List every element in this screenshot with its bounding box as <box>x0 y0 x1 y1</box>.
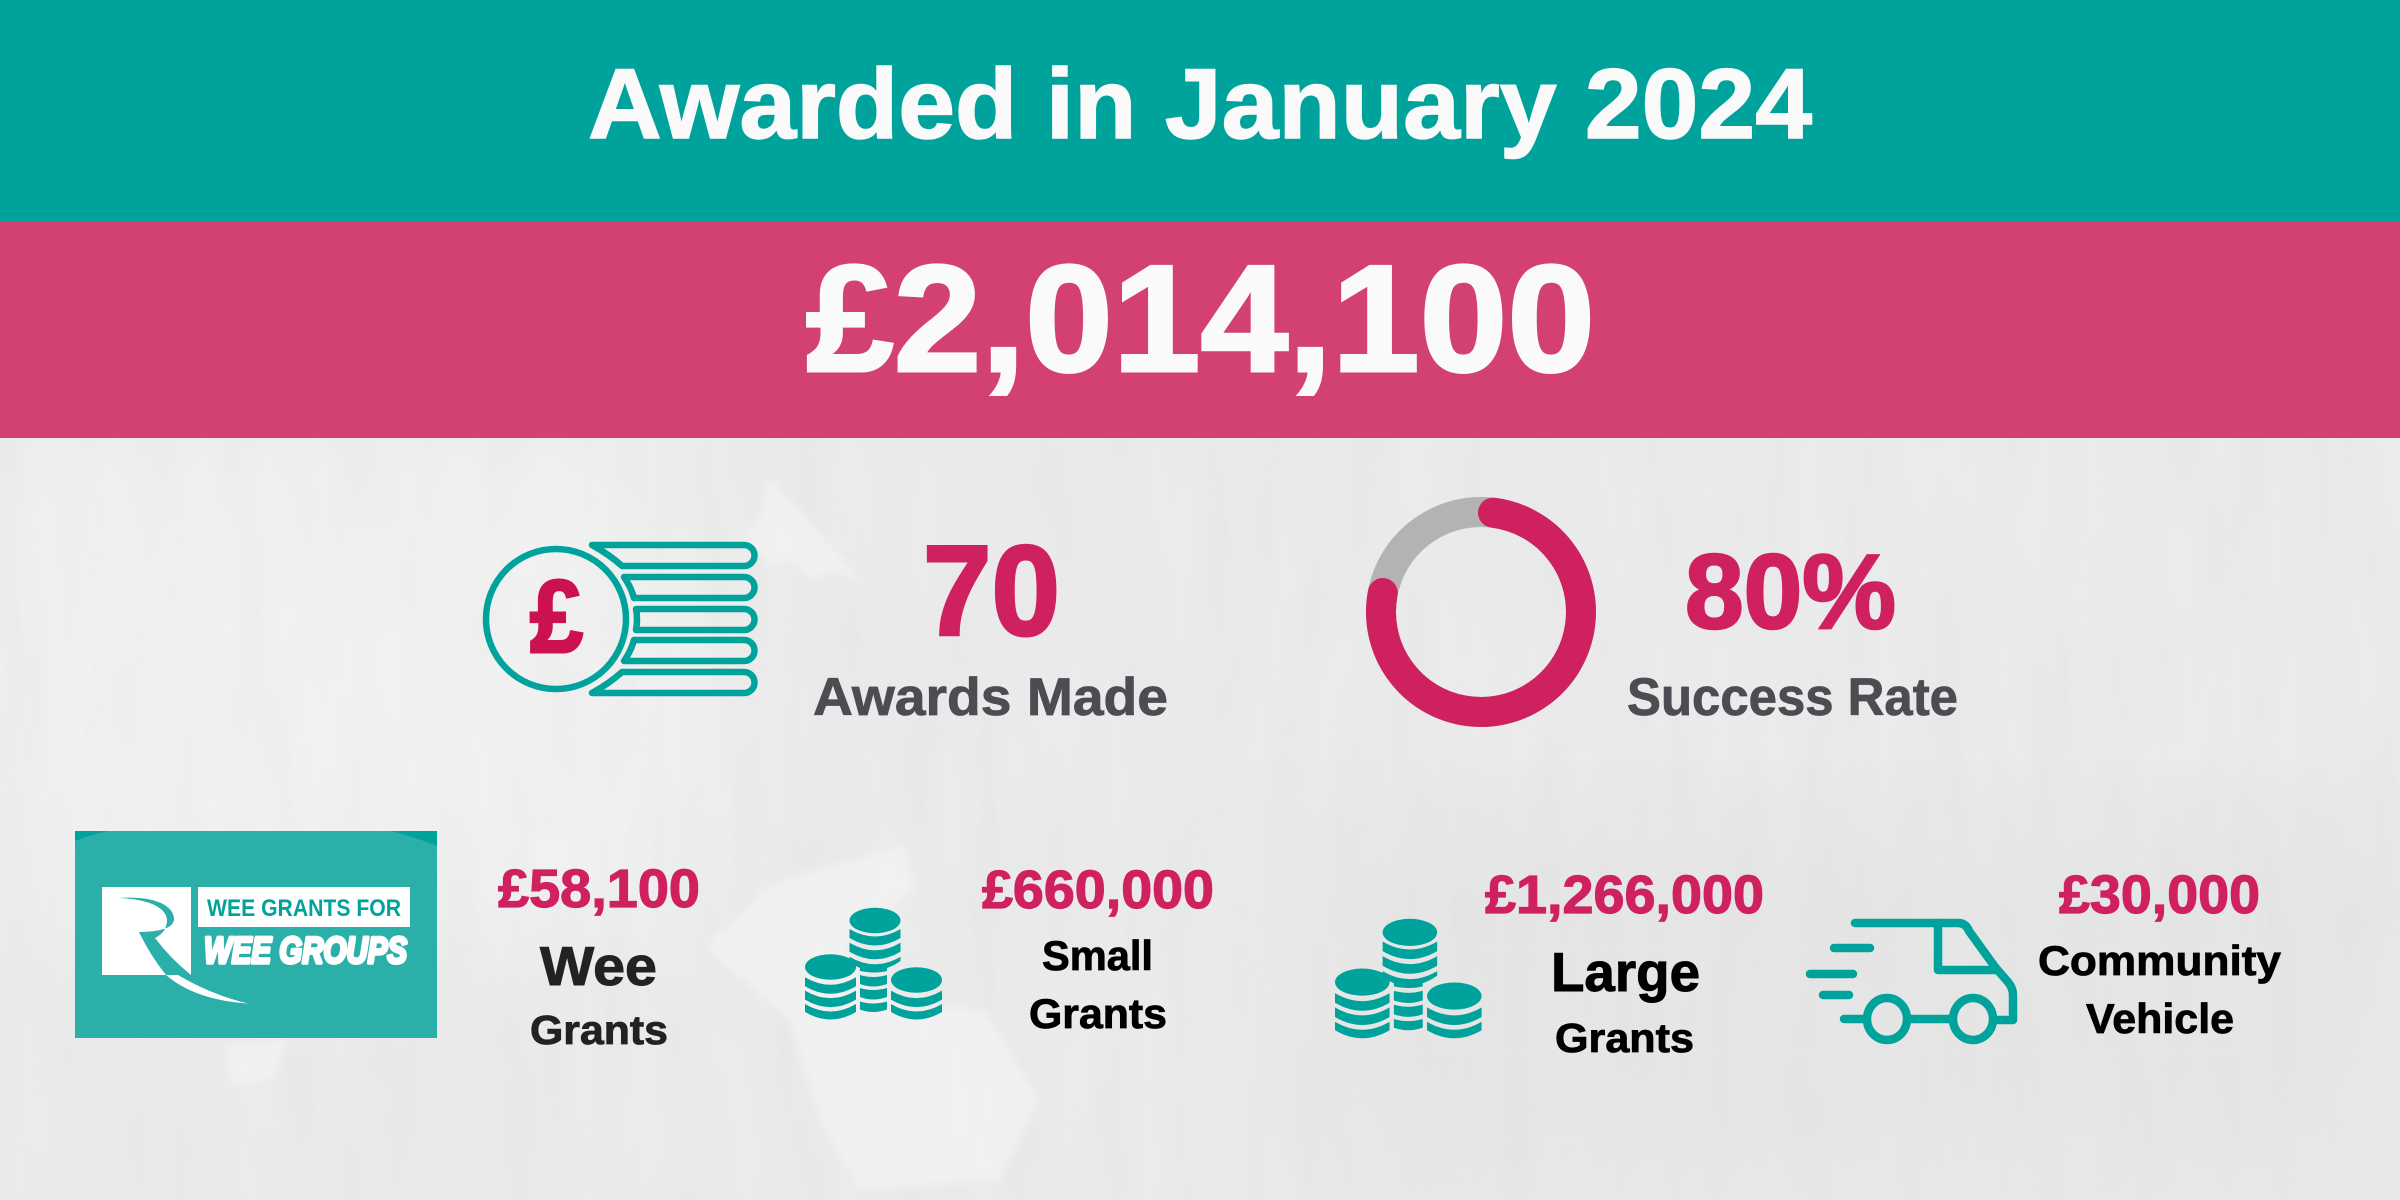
stat: success rate <box>1627 533 1958 727</box>
logo: wee grants for wee groups: WEE GROUPS <box>204 930 407 971</box>
stat: awards made: 70 <box>923 520 1060 663</box>
icon: pound coin stack: £ <box>530 559 583 674</box>
stat: community vehicle: £30,000 <box>2059 865 2260 925</box>
stat: small grants: Small <box>1042 932 1153 979</box>
icon: delivery van <box>1810 923 2013 1040</box>
stat: large grants: £1,266,000 <box>1485 865 1764 925</box>
stat: community vehicle: Community <box>2038 937 2282 984</box>
stat: wee grants <box>498 859 700 1053</box>
teal header band <box>0 0 2400 222</box>
stat: small grants: Grants <box>1029 990 1167 1037</box>
donut chart: 80 percent <box>1381 512 1581 712</box>
stat: awards made <box>813 520 1168 727</box>
icon: pound coin stack <box>486 545 755 693</box>
stat: community vehicle <box>2038 865 2282 1042</box>
logo: wee grants for wee groups: WEE GRANTS FOR <box>207 895 401 922</box>
stat: community vehicle: Vehicle <box>2086 995 2234 1042</box>
pink total band <box>0 222 2400 438</box>
title: Awarded in January 2024 <box>588 48 1812 159</box>
stat: awards made: Awards Made <box>813 668 1168 727</box>
stat: large grants: Grants <box>1555 1015 1694 1061</box>
stat: large grants <box>1485 865 1764 1061</box>
stat: small grants <box>982 860 1214 1037</box>
icon: large grants coin stacks <box>1335 919 1482 1038</box>
stat: large grants: Large <box>1551 941 1700 1003</box>
stat: wee grants: Wee <box>540 935 657 997</box>
stat: wee grants: £58,100 <box>498 859 700 919</box>
stat: success rate: 80% <box>1685 533 1896 651</box>
logo: wee grants for wee groups <box>75 831 437 1038</box>
stat: wee grants: Grants <box>530 1007 668 1053</box>
stat: small grants: £660,000 <box>982 860 1214 920</box>
total amount: £2,014,100 <box>806 234 1595 404</box>
icon: small grants coin stacks <box>805 908 942 1020</box>
stat: success rate: Success Rate <box>1627 668 1958 727</box>
